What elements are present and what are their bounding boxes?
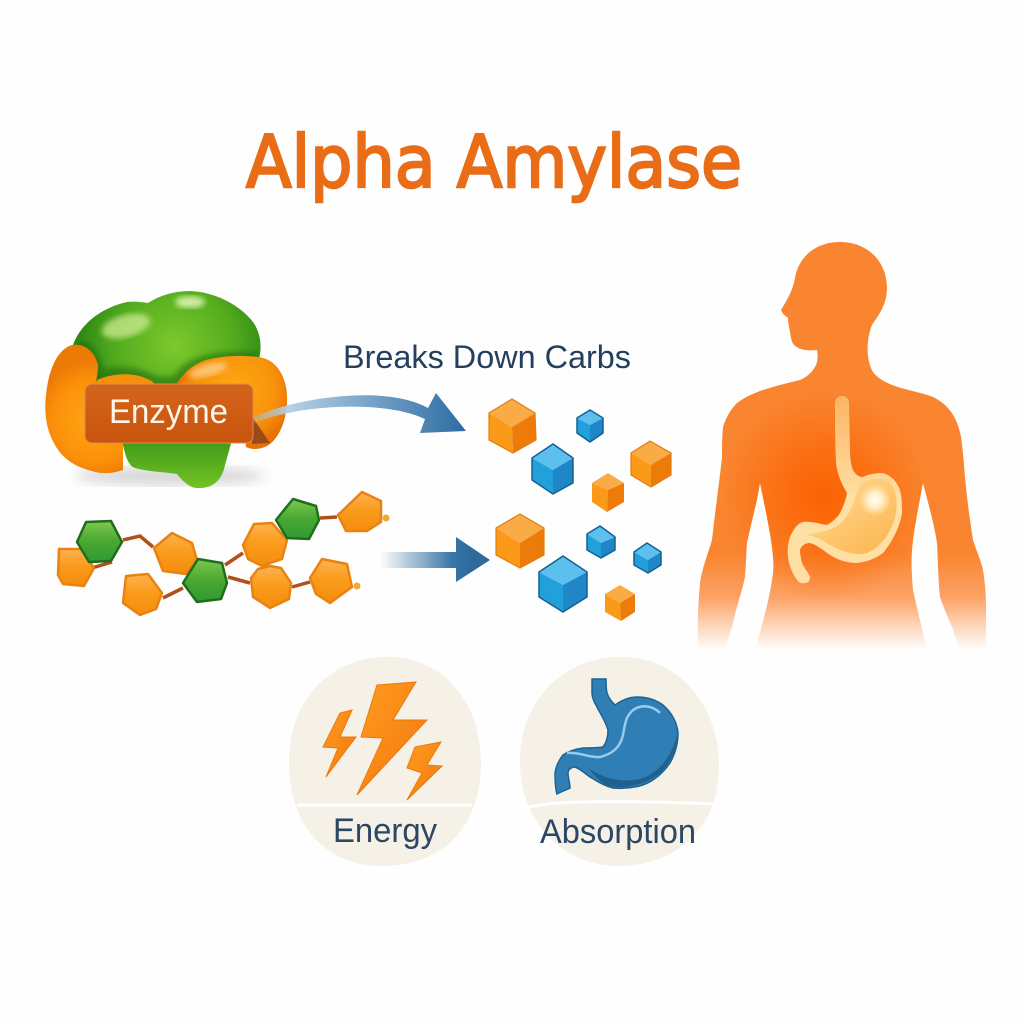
energy badge xyxy=(289,657,481,866)
enzyme label: Enzyme xyxy=(109,393,228,431)
lower sugar cubes xyxy=(496,514,661,621)
icon: stomach xyxy=(555,679,678,794)
enzyme orange lobes xyxy=(45,345,287,473)
absorption badge xyxy=(520,657,719,866)
straight arrow xyxy=(380,537,490,582)
enzyme label xyxy=(85,384,270,444)
label: breaks down carbs: Breaks Down Carbs xyxy=(343,339,631,375)
enzyme illustration xyxy=(45,291,287,488)
enzyme green lobes xyxy=(73,291,261,488)
curved arrow xyxy=(254,393,466,433)
carbohydrate chain xyxy=(58,492,390,615)
absorption badge: Absorption xyxy=(540,813,696,851)
upper sugar cubes xyxy=(489,399,671,512)
title: Alpha Amylase xyxy=(246,120,742,204)
human body silhouette xyxy=(690,235,990,655)
icon: lightning bolts xyxy=(323,682,442,800)
energy badge: Energy xyxy=(333,812,437,850)
stomach organ xyxy=(788,396,902,583)
